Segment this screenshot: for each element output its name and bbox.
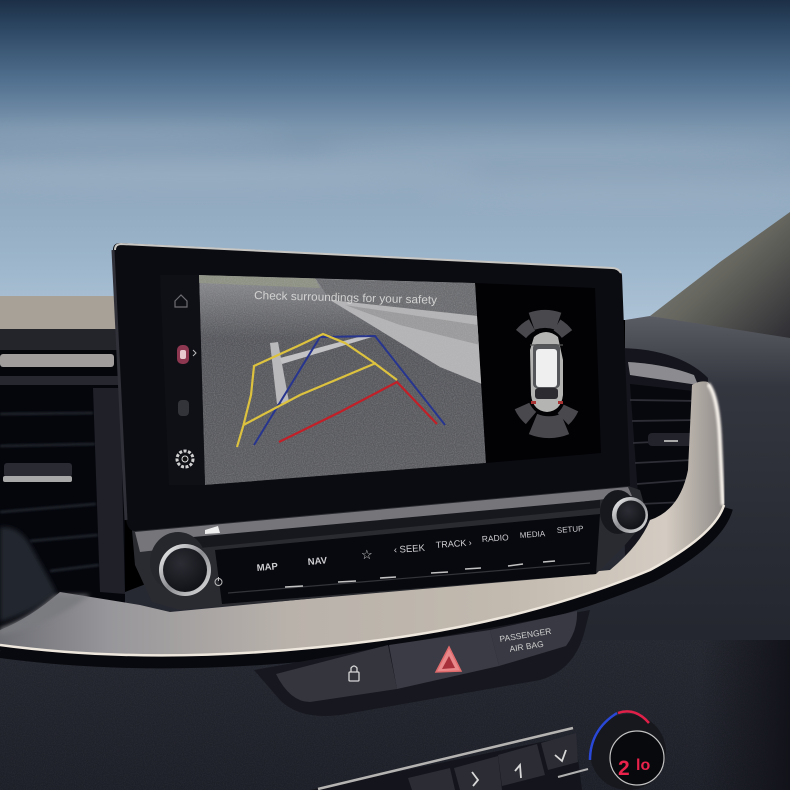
right air vent <box>622 348 708 560</box>
right knob <box>600 490 648 534</box>
button: passenger air bag: PASSENGER <box>499 626 552 644</box>
button labels: TRACK › <box>435 538 472 550</box>
warning text: Check surroundings for your safety <box>254 290 437 307</box>
button labels: RADIO <box>481 532 509 544</box>
menu icons <box>175 295 196 467</box>
temperature dial: 2 <box>618 757 630 780</box>
rear camera view <box>195 270 490 490</box>
button: passenger air bag: AIR BAG <box>509 639 544 654</box>
lower button housing <box>254 610 590 716</box>
windscreen pillar <box>650 212 790 342</box>
display bezel <box>113 243 630 531</box>
guide line: red <box>279 382 437 442</box>
button labels: MEDIA <box>520 529 546 540</box>
parking sensor display <box>521 319 571 427</box>
dashboard right <box>0 316 790 790</box>
power icon <box>215 577 222 586</box>
button labels <box>256 524 584 574</box>
left air vent <box>0 350 125 650</box>
parking stripes <box>270 342 289 404</box>
temperature dial: lo <box>636 757 650 774</box>
silver trim swoosh <box>0 381 727 662</box>
button: passenger air bag <box>490 611 577 666</box>
menu panel <box>160 275 205 485</box>
guide line: yellow <box>237 334 397 447</box>
dashboard top left <box>0 296 120 330</box>
screen right panel <box>475 283 601 463</box>
button labels: SETUP <box>557 524 584 535</box>
temperature dial <box>590 711 666 790</box>
sky background <box>0 0 790 320</box>
guide line: blue <box>254 336 445 445</box>
climate button row <box>310 728 588 790</box>
button: hazard <box>389 630 499 689</box>
left knob <box>150 532 211 596</box>
clouds <box>0 129 790 203</box>
button labels: ‹ SEEK <box>393 543 426 556</box>
button labels: NAV <box>307 555 328 568</box>
button labels: ☆ <box>361 547 373 562</box>
button: lock <box>276 645 397 702</box>
steering wheel stalk <box>0 527 56 622</box>
control panel with buttons <box>132 485 648 610</box>
car top view <box>530 332 563 412</box>
button labels: MAP <box>256 561 279 574</box>
